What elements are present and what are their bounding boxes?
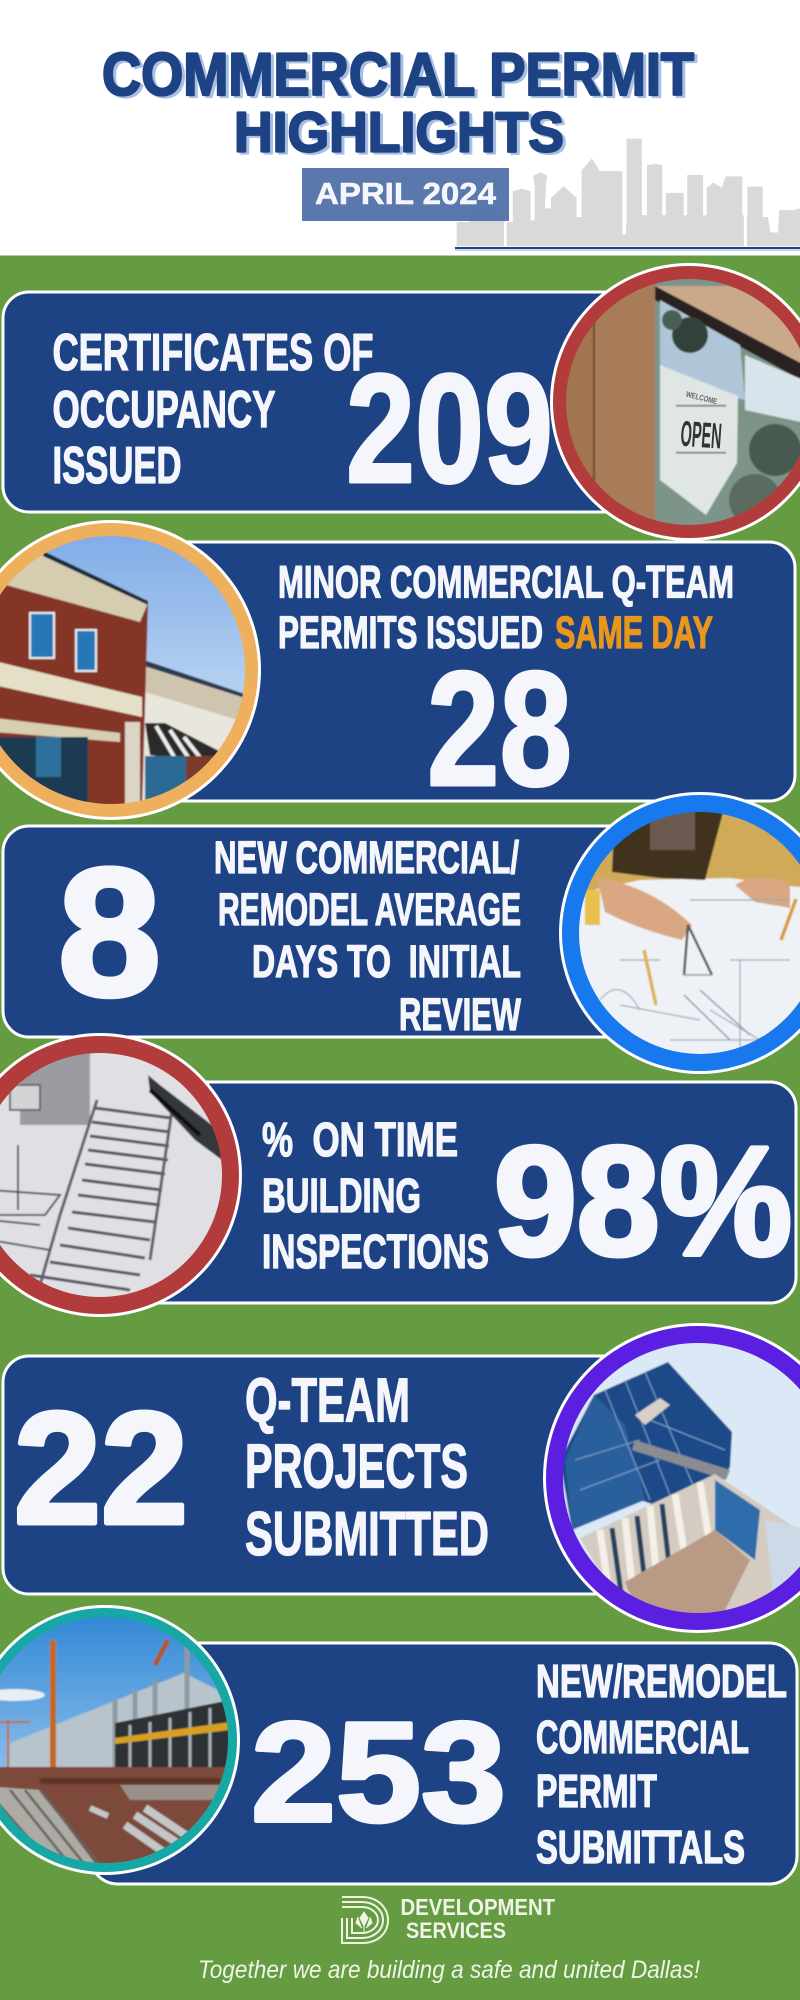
number 22: 22	[14, 1379, 188, 1557]
text: certificates of occupancy issued: OCCUPANCY	[52, 381, 276, 439]
number 28: 28	[427, 637, 572, 820]
text: development services	[400, 1894, 555, 1943]
text: percent on time building inspections: INSPECTIONS	[262, 1226, 489, 1279]
text: minor commercial q-team permits issued same day: SAME DAY	[555, 607, 713, 658]
text: percent on time building inspections: BUILDING	[262, 1170, 421, 1223]
icon: D mark with leaf	[342, 1897, 388, 1943]
text: minor commercial q-team permits issued same day: PERMITS ISSUED	[278, 607, 543, 658]
panel: new commercial remodel review	[3, 792, 800, 1074]
panel: on time building inspections	[0, 1033, 796, 1317]
date badge: APRIL 2024	[315, 176, 497, 211]
text: new commercial remodel average days to initial review: NEW COMMERCIAL/	[214, 832, 519, 883]
number 209: 209	[346, 342, 553, 515]
text: new commercial remodel average days to initial review	[214, 832, 521, 1040]
photo: open sign	[550, 263, 800, 541]
tagline: Together we are building a safe and united Dallas!	[198, 1956, 700, 1984]
text: q-team projects submitted	[245, 1366, 489, 1569]
text: new commercial remodel average days to initial review: REVIEW	[399, 989, 521, 1040]
date badge	[302, 168, 509, 221]
text: q-team projects submitted: PROJECTS	[245, 1432, 468, 1502]
photo: hands over blueprints	[559, 792, 800, 1074]
title: HIGHLIGHTS	[234, 100, 564, 164]
photo: blueprint and pen	[0, 1033, 242, 1317]
text: percent on time building inspections: % ON TIME	[262, 1114, 458, 1167]
number 8: 8	[58, 830, 161, 1034]
logo: development services	[342, 1894, 555, 1943]
text: certificates of occupancy issued: ISSUED	[52, 437, 182, 495]
text: q-team projects submitted: SUBMITTED	[245, 1500, 489, 1569]
text: percent on time building inspections	[262, 1114, 489, 1279]
panel: certificates of occupancy	[3, 263, 800, 541]
text: new commercial remodel average days to initial review: REMODEL AVERAGE	[218, 884, 521, 935]
text: minor commercial q-team permits issued same day	[278, 556, 734, 658]
text: development services: DEVELOPMENT	[400, 1894, 555, 1920]
title	[102, 41, 694, 164]
text: certificates of occupancy issued	[52, 324, 374, 495]
panel: new remodel commercial permit submittals	[0, 1605, 797, 1884]
photo: open sign: OPEN	[679, 413, 723, 456]
skyline illustration	[455, 139, 800, 251]
photo: construction site	[0, 1605, 240, 1875]
number 98%: 98%	[494, 1114, 792, 1288]
text: q-team projects submitted: Q-TEAM	[245, 1366, 410, 1436]
text: new remodel commercial permit submittals: PERMIT	[536, 1765, 657, 1817]
photo: open sign: WELCOME	[685, 390, 719, 406]
title: COMMERCIAL PERMIT	[102, 41, 694, 108]
text: certificates of occupancy issued: CERTIFICATES OF	[52, 324, 374, 382]
number 253: 253	[251, 1693, 506, 1852]
text: new commercial remodel average days to initial review: DAYS TO INITIAL	[252, 936, 521, 987]
panel: q-team projects submitted	[3, 1323, 800, 1633]
panel: minor commercial q-team	[0, 518, 795, 820]
photo: glass office tower	[543, 1323, 800, 1633]
text: new remodel commercial permit submittals	[536, 1655, 787, 1873]
photo: brick commercial building	[0, 518, 261, 820]
text: development services: SERVICES	[406, 1918, 506, 1943]
